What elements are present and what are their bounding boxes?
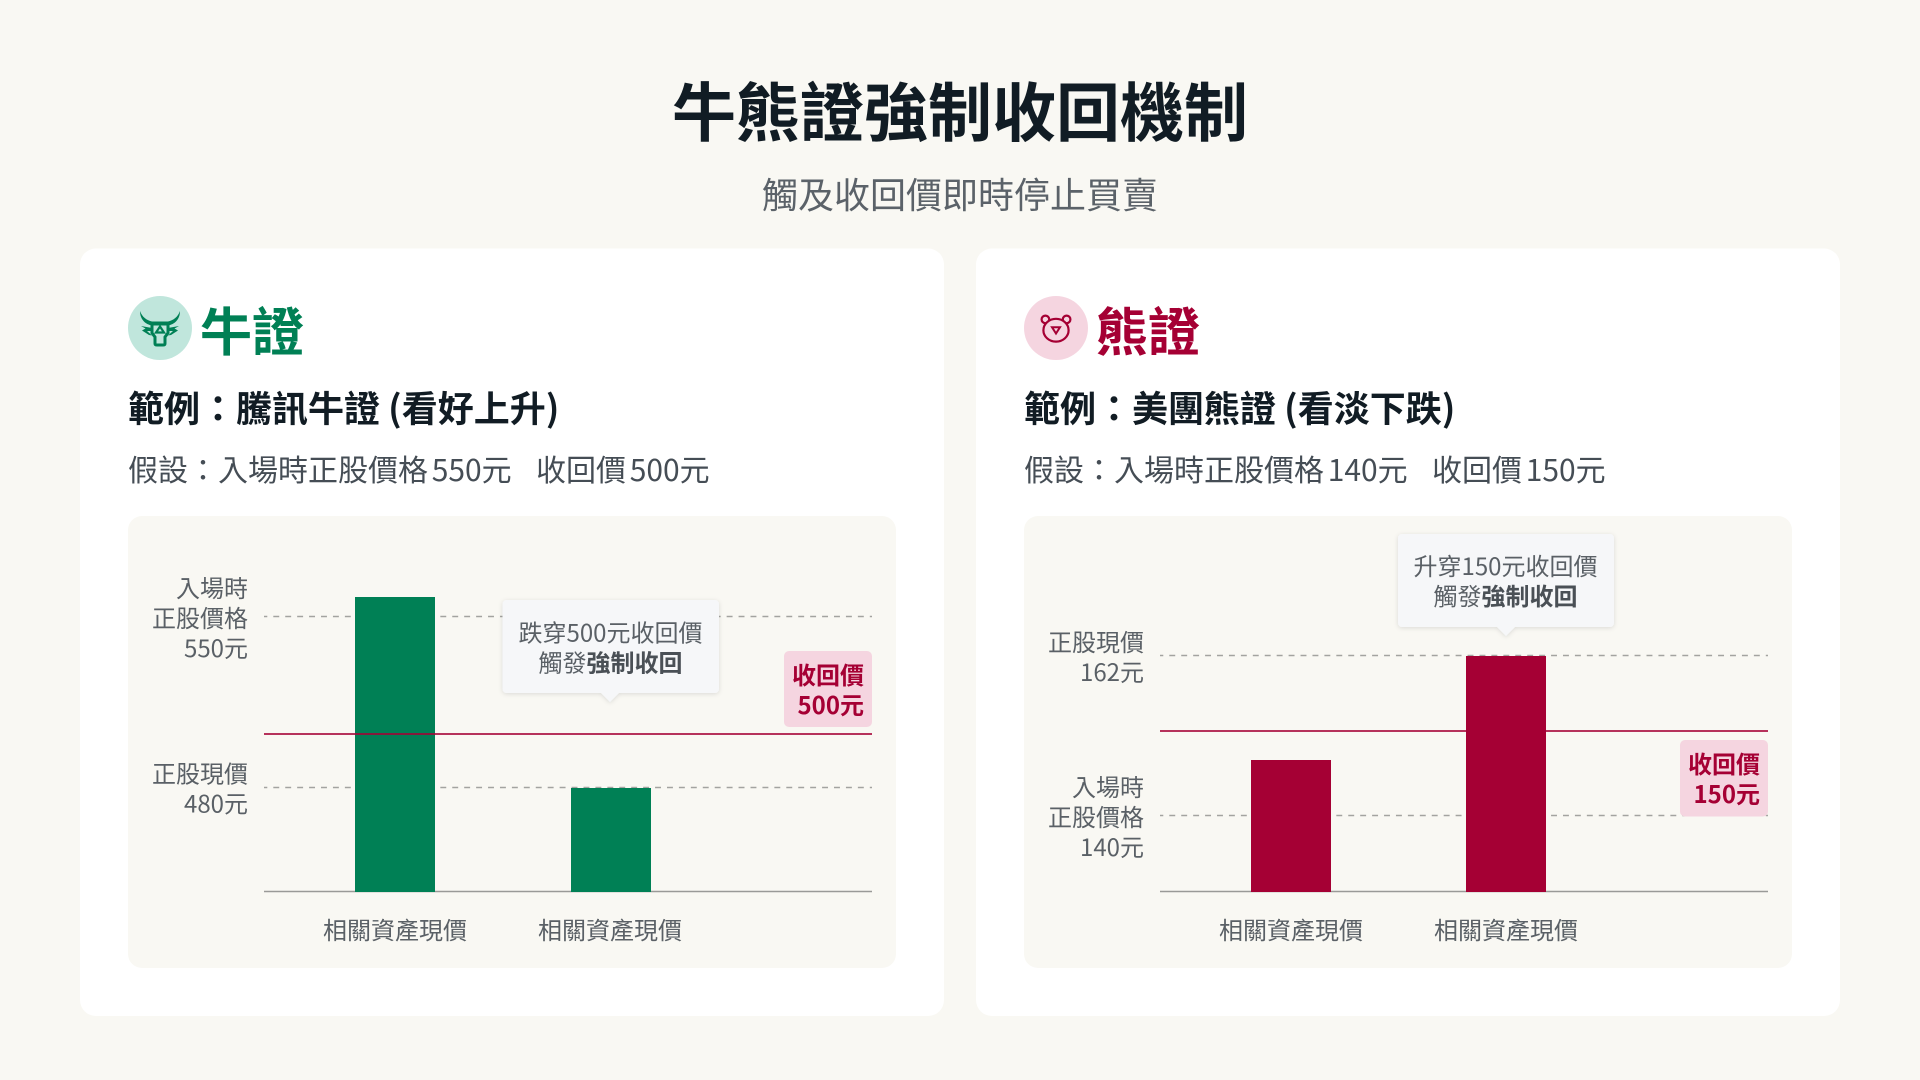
tag: recall price	[784, 651, 872, 727]
callout: forced recall: 觸發強制收回	[538, 644, 682, 678]
label: current price: 正股現價	[152, 754, 248, 790]
panel: bear certificate	[976, 248, 1840, 1016]
assumption: bear: 收回價 150元	[1432, 446, 1606, 490]
icon: bull	[128, 296, 192, 360]
subtitle: 觸及收回價即時停止買賣	[762, 167, 1158, 219]
tag: recall price: 500元	[798, 686, 864, 721]
current price dashed line	[264, 786, 872, 788]
label: current price: 正股現價	[1048, 623, 1144, 658]
label: entry price: 正股價格	[1048, 798, 1144, 833]
label: entry price: 入場時	[176, 569, 248, 604]
tag: recall price: 150元	[1694, 775, 1760, 810]
label: entry price: 140元	[1080, 828, 1144, 863]
tag: recall price	[1680, 740, 1768, 816]
tag: recall price: 收回價	[792, 656, 864, 691]
heading: bear: 熊證	[1096, 291, 1200, 366]
label: entry price	[1048, 768, 1144, 863]
label: entry price: 550元	[184, 629, 248, 664]
callout: forced recall: 跌穿500元收回價	[519, 614, 702, 648]
example: bull: 範例：騰訊牛證 (看好上升)	[128, 380, 559, 432]
label: entry price: 正股價格	[152, 599, 248, 634]
callout: forced recall: 升穿150元收回價	[1414, 547, 1597, 582]
assumption: bear: 假設：入場時正股價格 140元	[1024, 446, 1408, 490]
example: bear: 範例：美團熊證 (看淡下跌)	[1024, 380, 1455, 432]
label: current price: 162元	[1080, 653, 1144, 688]
entry price dashed line	[264, 616, 872, 618]
title: 牛熊證強制收回機制	[672, 63, 1248, 155]
assumption: bull: 收回價 500元	[536, 446, 710, 490]
recall price line	[264, 733, 872, 735]
label: current price	[1048, 623, 1144, 688]
label: current price: 480元	[184, 784, 248, 820]
x label 1: 相關資產現價	[323, 911, 467, 946]
x label 2: 相關資產現價	[1434, 911, 1578, 946]
chart: bear	[1024, 516, 1792, 968]
label: entry price	[152, 569, 248, 664]
recall price line	[1160, 730, 1768, 732]
bar: current price	[571, 788, 651, 892]
bar: entry price	[355, 597, 435, 892]
x label 2: 相關資產現價	[538, 911, 682, 946]
tag: recall price: 收回價	[1688, 745, 1760, 780]
panel: bull certificate	[80, 248, 944, 1016]
chart: bull	[128, 516, 896, 968]
bar: current price	[1466, 656, 1546, 892]
callout: forced recall	[1398, 534, 1614, 636]
callout: forced recall: 觸發強制收回	[1434, 577, 1578, 612]
baseline axis	[1160, 890, 1768, 892]
x label 1: 相關資產現價	[1219, 911, 1363, 946]
label: entry price: 入場時	[1072, 768, 1144, 803]
label: current price	[152, 754, 248, 820]
callout: forced recall	[502, 600, 719, 702]
entry price dashed line	[1160, 814, 1768, 816]
heading: bull: 牛證	[200, 291, 304, 366]
bar: entry price	[1251, 760, 1331, 892]
icon: bear	[1024, 296, 1088, 360]
baseline axis	[264, 890, 872, 892]
current price dashed line	[1160, 654, 1768, 656]
assumption: bull: 假設：入場時正股價格 550元	[128, 446, 512, 490]
